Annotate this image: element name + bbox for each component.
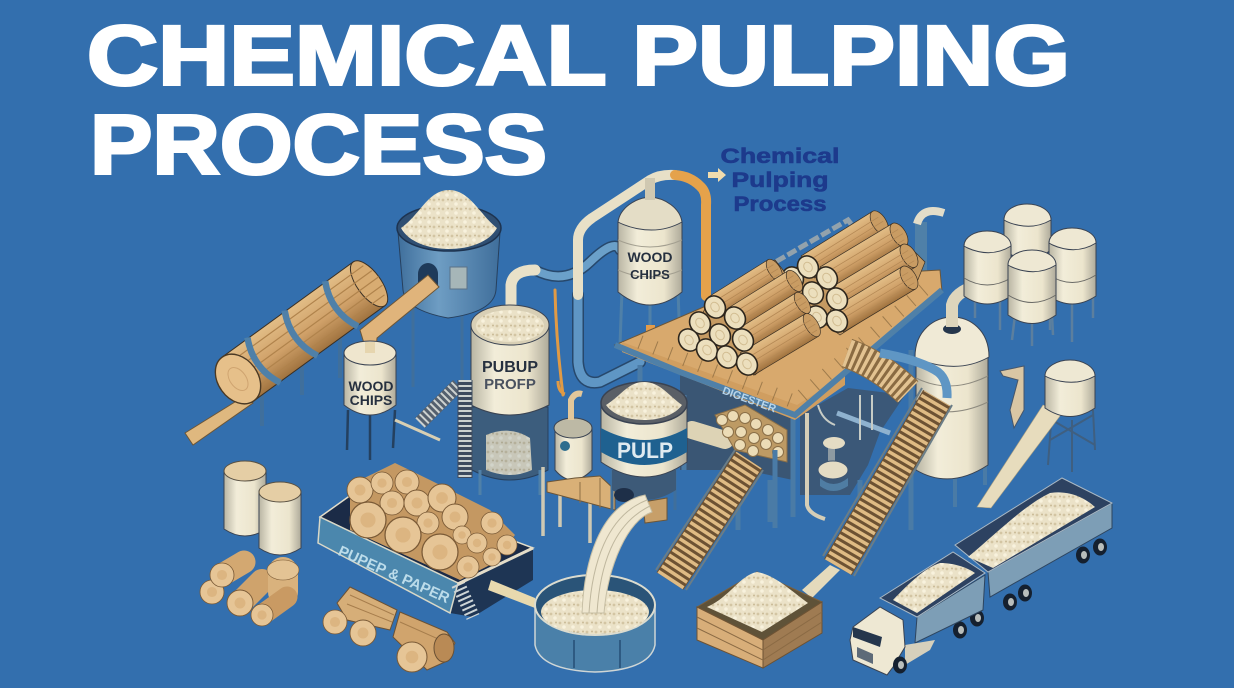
subtitle text: Pulping: [732, 169, 828, 192]
silo with wood chips pile: [397, 190, 501, 387]
upper platform stair: [847, 353, 908, 392]
platform sign: DIGESTER: [721, 385, 778, 415]
orange thin pipe: [555, 290, 563, 395]
icon: arrow: [708, 168, 726, 182]
pulp tank: [601, 382, 687, 510]
Pubup Profp tank: PROFP: [484, 376, 536, 393]
title: [87, 8, 1070, 192]
plank to pool: [488, 580, 535, 608]
back tank: [1004, 204, 1051, 259]
log stack left on platform: [674, 257, 824, 379]
leg tower: [1048, 410, 1095, 472]
small pump unit: [543, 381, 617, 552]
right tank: [1049, 228, 1096, 342]
stair right: [823, 388, 952, 576]
Pupep and Paper log bin: [318, 463, 535, 617]
title: CHEMICAL PULPING: [87, 8, 1070, 102]
digester exhaust pipe: [952, 285, 978, 327]
chute from silo to small tank: [360, 275, 439, 350]
pool with pulp stream: [535, 488, 667, 672]
front trailer: [880, 552, 985, 643]
bin: [318, 485, 535, 617]
left tank: [964, 231, 1011, 330]
orange pipe: [675, 175, 706, 296]
log pile under platform: [715, 405, 787, 462]
tank label: WOOD: [348, 378, 394, 394]
subtitle text: Chemical: [720, 145, 840, 168]
front tank: [1008, 250, 1056, 346]
pipes network: [511, 175, 706, 395]
table legs: [543, 467, 617, 552]
subtitle text: [720, 145, 840, 216]
cluster of four storage tanks: [964, 204, 1096, 346]
conveyor plank and legs: [185, 310, 370, 445]
blue return pipe: [578, 295, 640, 383]
wood on table: [547, 476, 615, 510]
wooden crate with chips: [697, 565, 840, 668]
truck with two trailers: [850, 478, 1112, 675]
stair left: [656, 450, 763, 590]
lower hopper: [472, 407, 548, 495]
tank with chute: [977, 360, 1095, 508]
process pipe to digester: [880, 353, 947, 398]
truck cab: [850, 607, 935, 675]
bundled log: [205, 254, 395, 413]
Pubup Profp tank: [471, 305, 549, 495]
chute into crate: [802, 565, 840, 598]
bin label: PUPEP & PAPER: [336, 543, 452, 607]
storage drums: [224, 461, 301, 555]
cream overhead pipe: [578, 175, 675, 295]
tank label: PULP: [617, 438, 673, 463]
log pile: [347, 463, 517, 580]
tank label: PUBUP: [482, 359, 538, 376]
tall digester tank: [915, 285, 989, 507]
blue connecting pipe: [535, 246, 620, 276]
wood chips tower: CHIPS: [630, 267, 670, 282]
log stack right on platform: [778, 208, 925, 336]
subtitle text: Process: [734, 193, 826, 216]
small stacked wood pieces: [200, 560, 299, 626]
small wood chips tank: [344, 341, 396, 460]
log mass: [689, 260, 812, 375]
title: PROCESS: [90, 98, 547, 192]
log ends: [674, 292, 762, 379]
small bracket: [1000, 366, 1024, 428]
main drum: [471, 325, 549, 415]
platform understructure and machinery: [640, 350, 911, 535]
rear trailer: [955, 478, 1112, 610]
support columns: [640, 350, 911, 535]
cream pipe to pulp tank: [511, 270, 535, 308]
cream tube: [692, 430, 725, 440]
subtitle label with arrow: [708, 145, 840, 216]
wood chips tower: [618, 178, 682, 355]
small wood chips tank: CHIPS: [350, 392, 392, 408]
pipe outlet and wood box: [614, 488, 634, 502]
machinery: [807, 395, 890, 519]
chute: [977, 405, 1063, 508]
pulp stream: [582, 495, 652, 613]
log conveyor with bundled log: [185, 254, 395, 445]
loose logs in foreground: [323, 587, 455, 672]
log mass: [790, 218, 925, 335]
rail: [765, 220, 858, 268]
chimney pipe: [917, 211, 944, 278]
tank label: WOOD: [627, 249, 673, 265]
platform deck: [615, 220, 942, 420]
access stairs: [395, 380, 465, 478]
log ends: [778, 252, 852, 336]
